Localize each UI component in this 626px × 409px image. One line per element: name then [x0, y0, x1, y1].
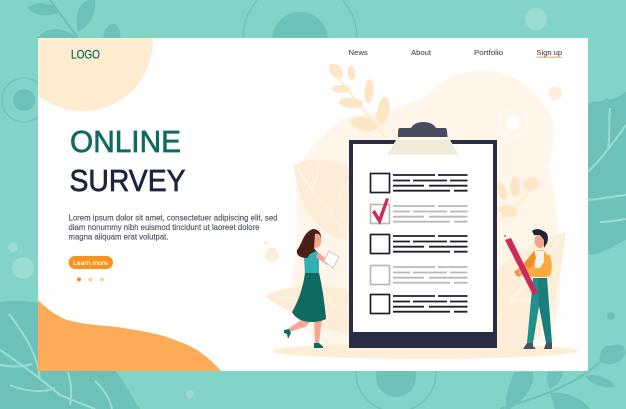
floor shadow: [272, 343, 578, 359]
navigation: [349, 48, 562, 58]
leaf lower left: [265, 286, 349, 335]
clipboard: [349, 122, 497, 348]
background foliage: [264, 61, 566, 345]
body text: Lorem ipsum dolor sit amet, consectetuer adipiscing elit, sed: [68, 212, 278, 222]
checkbox rows: [370, 174, 468, 314]
large leaf left of clipboard: [294, 160, 349, 240]
learn more button: Learn more: [73, 260, 108, 267]
row 2 checked: [370, 198, 468, 225]
white card: [38, 38, 588, 371]
row 5: [370, 294, 468, 314]
check mark: [372, 198, 389, 225]
row 3: [370, 234, 468, 254]
headline: ONLINE: [70, 124, 181, 159]
pagination dots: [77, 278, 104, 282]
logo: LOGO: [71, 48, 100, 62]
row 1: [370, 174, 468, 192]
peach background blob: [292, 71, 560, 345]
peach corner circle: [38, 38, 153, 111]
body text: diam nonummy nibh euismod tincidunt ut laoreet dolore: [68, 222, 260, 232]
orange wave: [38, 300, 221, 371]
row 4: [370, 266, 468, 284]
headline: SURVEY: [70, 163, 186, 198]
man with pencil: [504, 229, 552, 349]
headline: [70, 124, 186, 198]
navigation: Sign up: [536, 48, 562, 57]
sprig above clipboard: [326, 61, 392, 133]
small pale circles: [548, 86, 562, 100]
small sprig right of clipboard: [496, 175, 541, 219]
learn more button: [68, 256, 113, 269]
woman with tablet: [284, 229, 339, 348]
clip shadow: [387, 140, 459, 155]
leaf behind man: [497, 231, 566, 345]
body text: magna aliquam erat volutpat.: [68, 231, 168, 241]
navigation: Portfolio: [474, 48, 503, 57]
body text: [68, 212, 278, 241]
clip: [398, 122, 448, 137]
navigation: News: [349, 48, 368, 57]
navigation: About: [411, 48, 432, 57]
